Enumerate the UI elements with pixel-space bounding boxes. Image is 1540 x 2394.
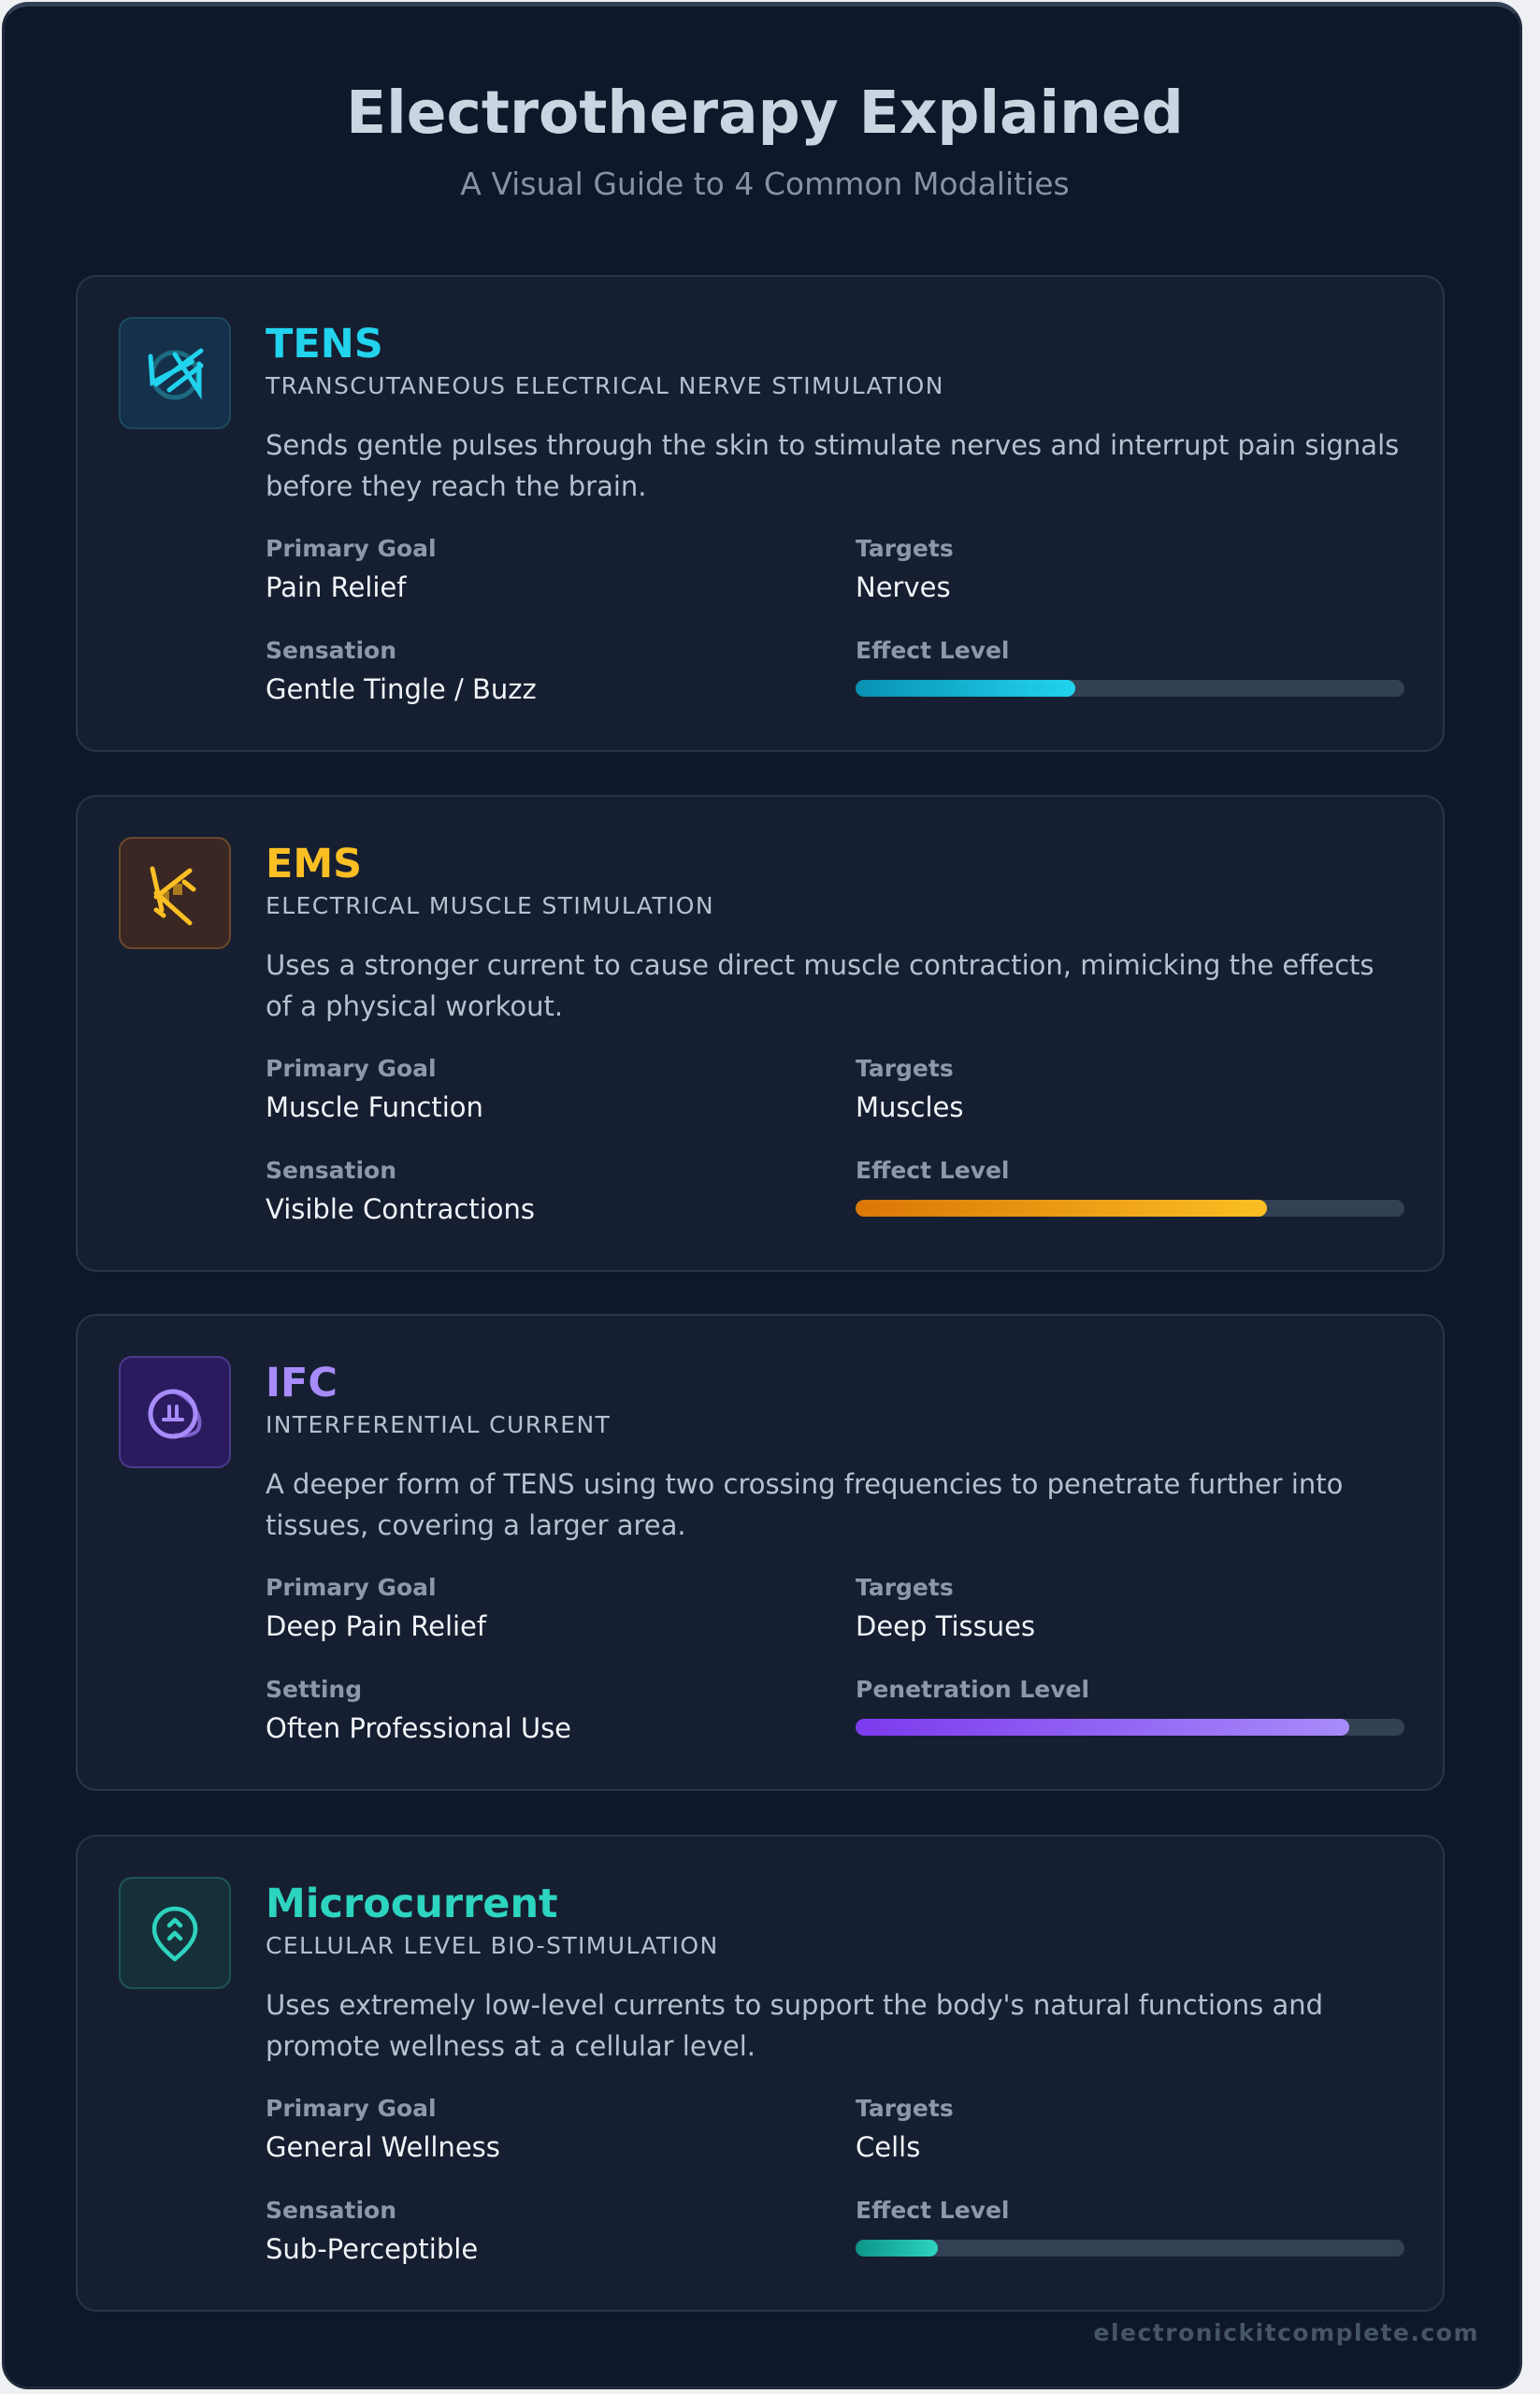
penetration label: Penetration Level — [856, 1676, 1089, 1703]
value: Muscle Function — [266, 1091, 483, 1123]
stat: primary goal: Primary Goal — [266, 535, 437, 562]
stat: primary goal: Primary Goal — [266, 1574, 437, 1601]
value: Nerves — [856, 571, 951, 603]
IFC name: IFC — [266, 1360, 338, 1406]
value: Gentle Tingle / Buzz — [266, 673, 537, 705]
EMS name: EMS — [266, 841, 362, 887]
subtitle: INTERFERENTIAL CURRENT — [266, 1411, 611, 1438]
stat: sensation: Sensation — [266, 2197, 396, 2224]
description: Sends gentle pulses through the skin to stimulate nerves and interrupt pain signals before they reach the brain. — [266, 429, 1399, 502]
icon: EMS muscle — [119, 837, 231, 949]
Microcurrent name: Microcurrent — [266, 1881, 558, 1927]
value: Muscles — [856, 1091, 963, 1123]
panel: EMS — [76, 795, 1445, 1272]
subtitle: ELECTRICAL MUSCLE STIMULATION — [266, 892, 714, 919]
stat: primary goal: Primary Goal — [266, 1055, 437, 1082]
description: Uses a stronger current to cause direct muscle contraction, mimicking the effects of a physical workout. — [266, 949, 1374, 1022]
description: Uses extremely low-level currents to support the body's natural functions and promote wellness at a cellular level. — [266, 1989, 1323, 2062]
bar: penetration level — [856, 1719, 1404, 1736]
value: Pain Relief — [266, 571, 406, 603]
stat: targets: Targets — [856, 1055, 954, 1082]
stat: sensation: Sensation — [266, 1157, 396, 1184]
value: Sub-Perceptible — [266, 2233, 478, 2265]
icon: TENS nerve — [119, 317, 231, 429]
value: General Wellness — [266, 2131, 500, 2163]
stat: sensation: Sensation — [266, 637, 396, 664]
icon: IFC — [119, 1356, 231, 1468]
bar: effect level — [856, 680, 1404, 697]
effect label: Effect Level — [856, 2197, 1009, 2224]
bar: effect level — [856, 1200, 1404, 1217]
title: Electrotherapy Explained — [346, 79, 1184, 147]
stat: targets: Targets — [856, 2095, 954, 2122]
icon: microcurrent drop — [119, 1877, 231, 1989]
panel: Microcurrent — [76, 1835, 1445, 2312]
value: Deep Pain Relief — [266, 1610, 486, 1642]
stat: targets: Targets — [856, 1574, 954, 1601]
stat: targets: Targets — [856, 535, 954, 562]
effect label: Effect Level — [856, 637, 1009, 664]
footer: source: electronickitcomplete.com — [1094, 2319, 1479, 2346]
panel: TENS — [76, 275, 1445, 752]
TENS name: TENS — [266, 321, 383, 368]
stat: primary goal: Primary Goal — [266, 2095, 437, 2122]
description: A deeper form of TENS using two crossing frequencies to penetrate further into tissues, covering a larger area. — [266, 1468, 1343, 1541]
value: Often Professional Use — [266, 1712, 571, 1744]
stat: setting: Setting — [266, 1676, 362, 1703]
bar: effect level — [856, 2240, 1404, 2257]
value: Deep Tissues — [856, 1610, 1035, 1642]
subtitle: CELLULAR LEVEL BIO-STIMULATION — [266, 1932, 719, 1959]
subtitle: TRANSCUTANEOUS ELECTRICAL NERVE STIMULATION — [266, 372, 944, 399]
value: Cells — [856, 2131, 920, 2163]
panel: IFC — [76, 1314, 1445, 1791]
subtitle: A Visual Guide to 4 Common Modalities — [460, 166, 1070, 202]
value: Visible Contractions — [266, 1193, 535, 1225]
effect label: Effect Level — [856, 1157, 1009, 1184]
